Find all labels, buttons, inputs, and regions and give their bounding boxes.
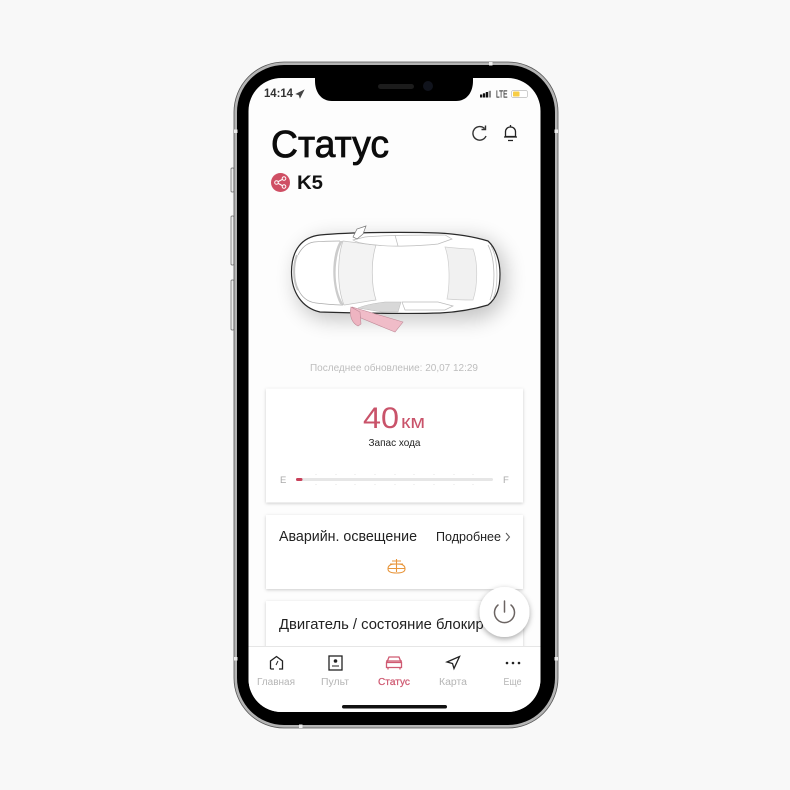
rear window — [445, 247, 477, 300]
lower side windows — [358, 302, 401, 312]
panel: hazard lights — [266, 515, 523, 589]
tab: map: Карта — [439, 677, 467, 688]
open door — [352, 307, 403, 332]
panel: engine and lock status: Двигатель / состояние блокиро — [279, 617, 492, 633]
vehicle name — [271, 173, 323, 194]
tab: home — [257, 656, 295, 688]
icon: hazard car — [388, 559, 405, 573]
fuel gauge: E — [280, 475, 286, 486]
tab: status — [378, 657, 410, 688]
panel: range — [266, 388, 523, 502]
notch — [315, 76, 473, 101]
panel: engine and lock status — [264, 600, 524, 646]
range value — [363, 402, 425, 435]
upper side windows — [353, 235, 452, 246]
tab: status: Статус — [378, 677, 410, 688]
range value: км — [401, 412, 425, 432]
vehicle name: K5 — [297, 173, 323, 194]
panel: hazard lights: Подробнее — [436, 529, 501, 544]
tab: remote: Пульт — [321, 677, 349, 688]
tab: more: Еще — [504, 677, 522, 688]
car illustration — [292, 226, 506, 332]
status bar — [264, 88, 528, 100]
phone — [231, 62, 558, 728]
tab bar — [248, 646, 541, 713]
fuel gauge: F — [503, 475, 509, 486]
range value: 40 — [363, 402, 399, 435]
last update: Последнее обновление: 20,07 12:29 — [310, 362, 478, 374]
tail lines — [488, 245, 494, 300]
tab: more — [504, 662, 522, 688]
windshield — [339, 241, 376, 305]
range label: Запас хода — [368, 437, 421, 449]
icon: bell — [504, 125, 517, 140]
mirror — [353, 226, 366, 239]
status bar: LTE — [496, 90, 508, 100]
title: Статус — [271, 124, 389, 166]
power button — [480, 587, 530, 637]
icon: refresh — [473, 126, 486, 140]
tab: map — [439, 656, 467, 688]
home indicator — [342, 705, 447, 708]
tab: home: Главная — [257, 677, 295, 688]
tab: remote — [321, 656, 349, 688]
hood lines — [298, 241, 343, 305]
fuel gauge — [280, 474, 509, 486]
status bar: 14:14 — [264, 88, 294, 100]
panel: hazard lights: Аварийн. освещение — [279, 529, 417, 545]
chevron — [506, 533, 510, 541]
